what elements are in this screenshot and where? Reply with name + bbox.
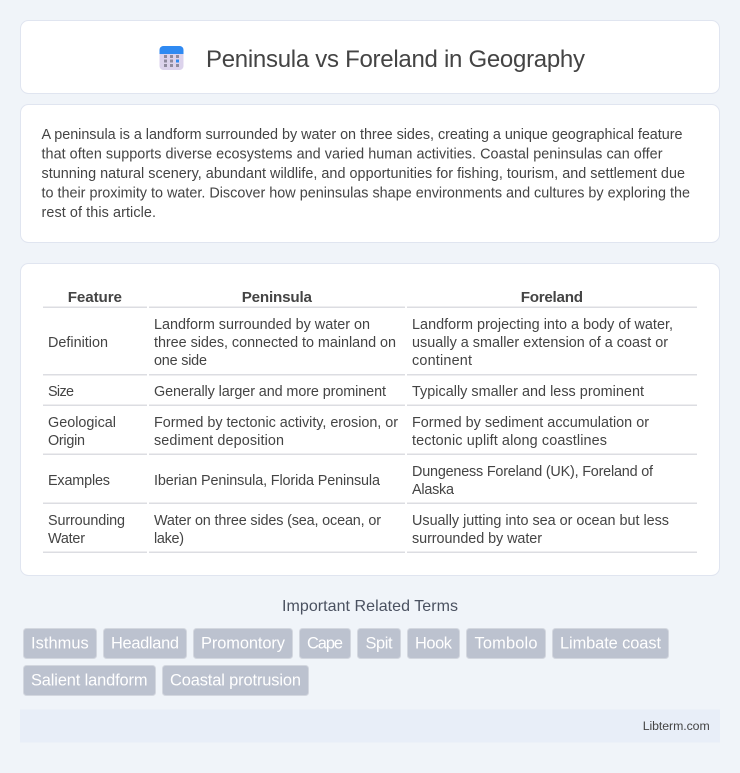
row: size [48,384,644,400]
row: geological origin: Formed by sediment accumulation or [412,415,649,431]
row: surrounding water: Surrounding [48,513,125,529]
row: surrounding water: lake) [154,531,184,547]
chip: Promontory: Promontory [201,635,286,653]
row: examples: Alaska [412,482,454,498]
chip: Isthmus: Isthmus [31,635,89,653]
row: examples [48,464,654,498]
chip: Spit [358,628,400,658]
row: size: Size [48,384,74,400]
related term chips [24,628,668,696]
intro text: A peninsula is a landform surrounded by water on three sides, creating a unique geographical feature [42,127,682,143]
intro text: to their proximity to water. Discover how peninsulas shape environments and cultures by exploring the [42,186,690,202]
panel: introduction [20,104,720,242]
chip: Hook [408,628,460,658]
row: definition [48,317,673,369]
icon: calendar [160,46,184,70]
row: surrounding water: surrounded by water [412,531,542,547]
chip: Isthmus [24,628,96,658]
chip: Headland: Headland [111,635,179,653]
chip: Tombolo [466,628,546,658]
row: definition: one side [154,353,207,369]
row: geological origin: tectonic uplift along coastlines [412,433,607,449]
table header [68,289,583,306]
row: examples: Examples [48,473,110,489]
table header: Foreland [521,289,583,306]
row: surrounding water [48,513,669,547]
chip: Salient landform [24,666,156,696]
chip: Cape: Cape [307,635,343,653]
row: definition: three sides, connected to mainland on [154,335,396,351]
chip: Promontory [194,628,292,658]
row: geological origin: sediment deposition [154,433,284,449]
row: definition: Landform surrounded by water on [154,317,370,333]
panel: comparison table [20,264,720,576]
row: definition: continent [412,353,472,369]
footer credit: Libterm.com [643,719,710,733]
row: surrounding water: Water on three sides (sea, ocean, or [154,513,381,529]
row: definition: Landform projecting into a body of water, [412,317,673,333]
chip: Coastal protrusion: Coastal protrusion [170,672,301,690]
row: geological origin [48,415,649,449]
heading: related terms: Important Related Terms [282,598,458,615]
table rules [43,306,697,553]
intro text: stunning natural scenery, abundant wildlife, and opportunities for fishing, tourism, and settlement due [42,166,685,182]
row: definition: Definition [48,335,108,351]
table header: Feature [68,289,122,306]
row: definition: usually a smaller extension of a coast or [412,335,668,351]
row: size: Typically smaller and less prominent [412,384,644,400]
chip: Limbate coast: Limbate coast [560,635,661,653]
row: geological origin: Formed by tectonic activity, erosion, or [154,415,398,431]
chip: Spit: Spit [366,635,393,653]
row: geological origin: Geological [48,415,116,431]
chip: Coastal protrusion [162,666,308,696]
row: size: Generally larger and more prominent [154,384,386,400]
row: surrounding water: Usually jutting into sea or ocean but less [412,513,669,529]
row: examples: Iberian Peninsula, Florida Peninsula [154,473,380,489]
chip: Headland [104,628,186,658]
footer bar [20,710,720,742]
chip: Cape [300,628,350,658]
intro text [42,127,690,221]
header panel [20,20,720,94]
chip: Hook: Hook [415,635,453,653]
chip: Salient landform: Salient landform [31,672,148,690]
title: Peninsula vs Foreland in Geography [206,46,585,73]
chip: Tombolo: Tombolo [474,635,538,653]
row: surrounding water: Water [48,531,85,547]
row: geological origin: Origin [48,433,85,449]
intro text: rest of this article. [42,205,156,221]
intro text: that often supports diverse ecosystems and varied human activities. Coastal peninsulas can offer [42,146,663,162]
row: examples: Dungeness Foreland (UK), Foreland of [412,464,654,480]
chip: Limbate coast [552,628,668,658]
table header: Peninsula [242,289,313,306]
